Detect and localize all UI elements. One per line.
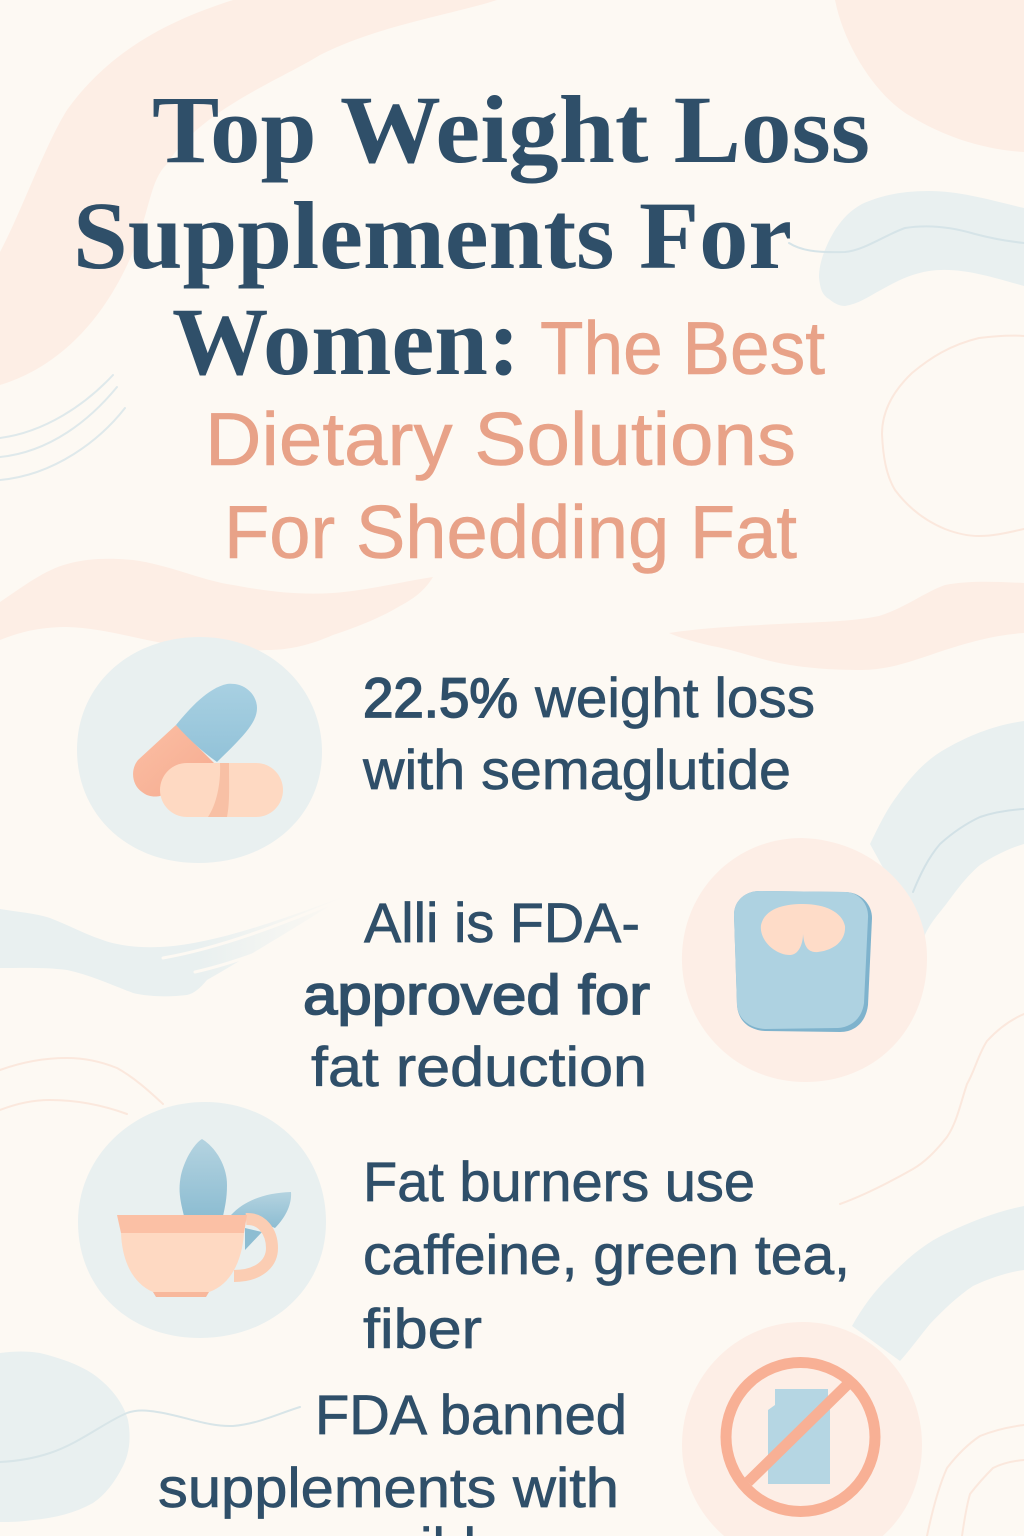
text: Fat burners use caffeine, green tea, fiber: caffeine, green tea, — [363, 1223, 850, 1286]
title line: Supplements For: Supplements For — [73, 182, 792, 289]
subtitle — [205, 306, 825, 574]
icon: banned supplement bottle — [682, 1322, 922, 1536]
subtitle line: For Shedding Fat: For Shedding Fat — [224, 490, 797, 574]
icon: pills — [77, 637, 322, 863]
icon: tea cup with leaves — [78, 1102, 326, 1338]
text: 22.5% weight loss with semaglutide: with semaglutide — [362, 738, 791, 801]
text: Alli is FDA-approved for fat reduction: Alli is FDA- — [364, 891, 640, 954]
text: FDA banned supplements with: supplements with — [158, 1456, 619, 1519]
subtitle line: Dietary Solutions: Dietary Solutions — [205, 397, 796, 481]
text: Alli is FDA-approved for fat reduction: approved for — [303, 963, 650, 1026]
text: Fat burners use caffeine, green tea, fiber: fiber — [363, 1297, 482, 1360]
title — [73, 76, 870, 395]
text: FDA banned supplements with — [158, 1383, 627, 1536]
text: Fat burners use caffeine, green tea, fiber — [363, 1150, 850, 1360]
text: Alli is FDA-approved for fat reduction: fat reduction — [311, 1035, 647, 1098]
text: 22.5% weight loss with semaglutide — [362, 666, 815, 801]
text: FDA banned supplements with: FDA banned — [315, 1383, 627, 1446]
text: 22.5% weight loss with semaglutide: 22.5% — [363, 666, 518, 729]
subtitle line: The Best: The Best — [540, 306, 825, 390]
text: Fat burners use caffeine, green tea, fiber: Fat burners use — [363, 1150, 755, 1213]
text: 22.5% weight loss with semaglutide: weight loss — [534, 666, 815, 729]
title line: Top Weight Loss: Top Weight Loss — [152, 76, 870, 183]
icon: bathroom scale — [682, 838, 927, 1082]
text: Alli is FDA-approved for fat reduction — [303, 891, 650, 1098]
title line: Women: Women: — [172, 288, 520, 395]
